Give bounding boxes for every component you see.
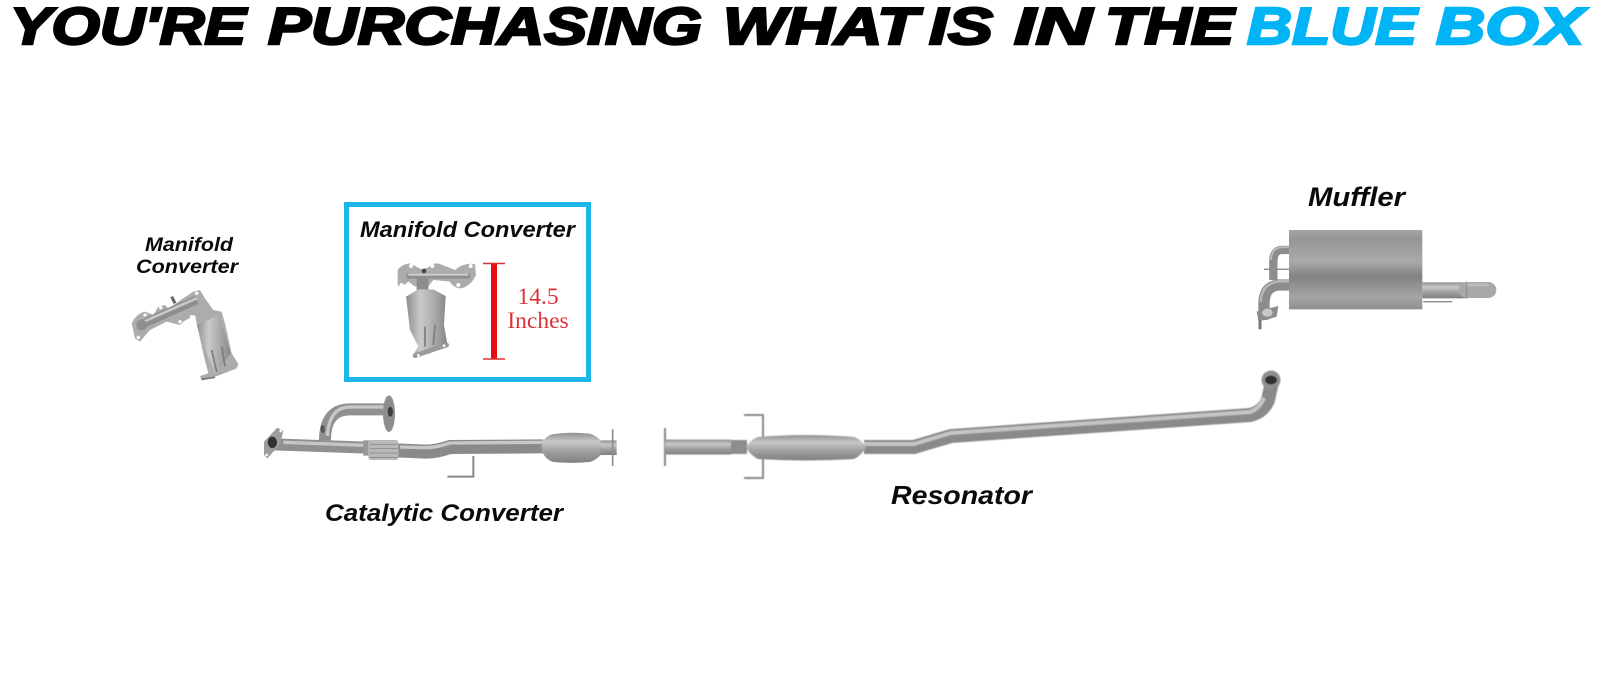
dimension text: 14.5: 14.5 (517, 284, 559, 310)
dimension text: Inches: Inches (507, 308, 569, 334)
dimension line: 14.5 inches (483, 263, 505, 359)
panel: blue box (346, 204, 588, 380)
label: muffler: Muffler (1308, 182, 1407, 212)
part: resonator pipe (665, 370, 1280, 478)
blue box frame (346, 204, 588, 380)
part: catalytic converter pipe (264, 395, 617, 477)
label: converter line: Converter (136, 256, 240, 278)
label: resonator: Resonator (891, 480, 1034, 510)
panel: left manifold converter (132, 234, 240, 381)
title (10, 0, 1588, 56)
part: upright manifold converter (398, 263, 476, 357)
label: catalytic converter: Catalytic Converter (325, 500, 565, 527)
part: muffler (1257, 230, 1488, 329)
label: manifold converter: Manifold (145, 234, 234, 256)
part: angled manifold converter (132, 290, 238, 381)
heading: manifold converter: Manifold Converter (360, 217, 576, 242)
